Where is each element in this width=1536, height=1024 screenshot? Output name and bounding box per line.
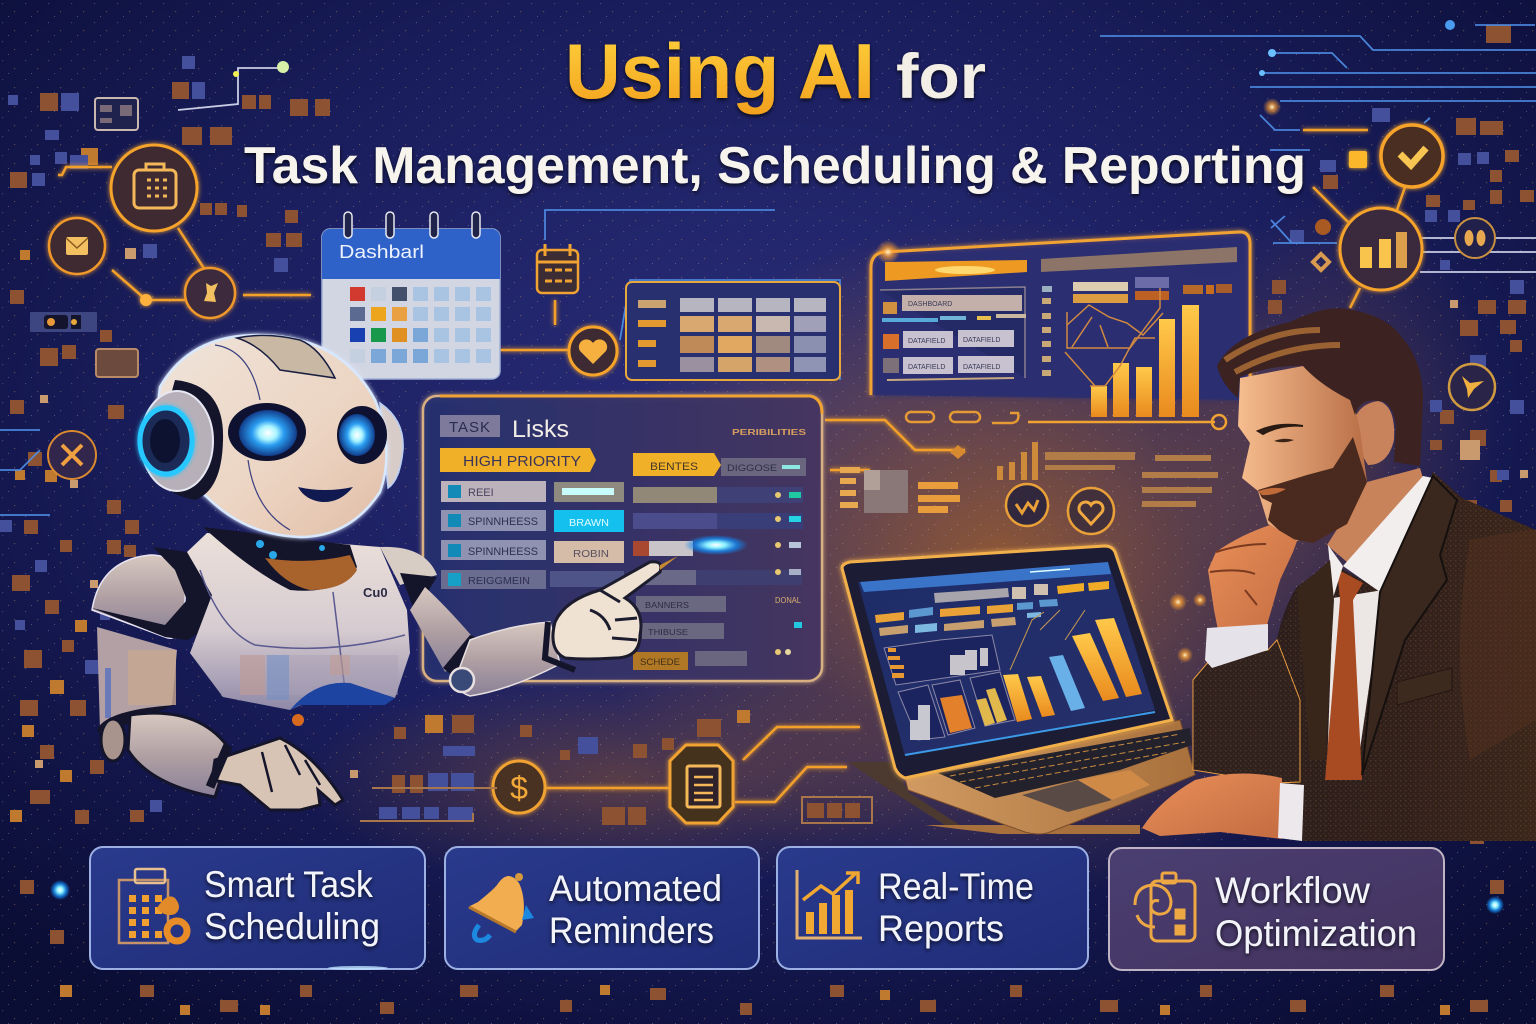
glow orbs <box>50 593 1504 970</box>
card: smart task scheduling <box>90 847 425 969</box>
robot upper arm <box>97 627 177 730</box>
lips <box>1258 488 1286 495</box>
icon: mail node <box>49 218 105 274</box>
small window left <box>96 349 138 377</box>
lower hand <box>1142 773 1282 839</box>
small text inside forms: DATAFIELD <box>963 364 1000 371</box>
small text inside forms: DATAFIELD <box>908 364 945 371</box>
right task rows: BANNERS <box>645 601 689 610</box>
icon: calendar node <box>111 145 197 231</box>
left task rows: SPINNHEESS <box>468 546 538 558</box>
trackpad <box>1022 780 1112 812</box>
card: workflow optimization <box>1109 848 1444 970</box>
robot torso reflection <box>240 655 398 695</box>
robot earpiece <box>150 380 223 500</box>
icon: bell <box>469 873 534 940</box>
card text: Reminders <box>549 910 714 951</box>
robot shoulder band <box>92 547 212 640</box>
robot shoulder <box>92 547 212 730</box>
capsule connectors <box>906 412 1018 423</box>
left forms <box>880 287 1026 380</box>
small chart panels <box>884 635 1000 685</box>
robot smile <box>298 487 353 502</box>
circuit lines <box>0 25 1536 515</box>
status tag <box>633 453 806 476</box>
robot bottom arch <box>290 683 395 710</box>
keyboard <box>938 728 1192 798</box>
icon: dollar node <box>493 761 545 813</box>
left task rows: ROBIN <box>573 549 609 560</box>
circuit lines: white <box>178 68 1536 272</box>
eye and brow <box>1258 425 1303 442</box>
card text: Real-Time <box>878 866 1034 907</box>
bottom rail <box>1028 421 1215 423</box>
card text: Workflow <box>1215 870 1370 911</box>
robot pointing hand <box>553 556 678 659</box>
icon: link node <box>1455 218 1495 258</box>
calendar grid <box>350 287 491 363</box>
calendar rings <box>344 212 480 238</box>
card text: Automated <box>549 868 722 909</box>
card: real-time reports <box>777 847 1088 969</box>
lower connectors <box>360 745 872 823</box>
task heading: PERIBILITIES <box>732 428 807 437</box>
header bars <box>885 260 1027 281</box>
robot right arm <box>380 547 575 696</box>
robot lower hand <box>210 738 343 810</box>
title <box>244 27 1306 195</box>
suit body <box>1240 472 1536 841</box>
bar chart <box>1091 305 1199 417</box>
face <box>1238 366 1367 541</box>
torso seams <box>200 570 405 690</box>
subtitle: Task Management, Scheduling & Reporting <box>244 137 1306 195</box>
orange dot <box>1315 219 1331 235</box>
task heading: TASK <box>449 419 491 436</box>
icon: document node <box>670 745 733 823</box>
robot eyes <box>228 403 306 461</box>
circuit lines: orange <box>58 130 1405 802</box>
card text: Optimization <box>1215 913 1417 954</box>
beard <box>1258 437 1367 543</box>
small window top-left <box>95 98 138 130</box>
man <box>1142 308 1536 841</box>
mini metrics <box>1042 286 1052 376</box>
icon: arrow node <box>1449 364 1495 410</box>
tie <box>1325 569 1363 780</box>
calendar panel <box>322 212 500 379</box>
task heading: Lisks <box>512 416 569 443</box>
left task rows: SPINNHEESS <box>468 516 538 528</box>
title: Using AI: Using AI <box>565 27 875 115</box>
laptop screen <box>858 562 1155 756</box>
right task rows: DONAL <box>775 596 802 605</box>
robot right ear <box>380 403 403 488</box>
screen widgets <box>875 581 1142 740</box>
raised sleeve <box>1193 640 1300 783</box>
icon: growth chart <box>797 870 862 938</box>
legend blocks <box>1073 282 1128 291</box>
icon: calendar small <box>537 244 578 293</box>
laptop chart bars <box>1003 674 1032 722</box>
icon: calendar gear <box>119 869 187 943</box>
robot chest label: Cu0 <box>363 585 388 600</box>
suit texture <box>1193 472 1536 841</box>
card text: Reports <box>878 908 1004 949</box>
left task rows: BRAWN <box>569 518 609 529</box>
small yellow glow dots <box>233 20 1455 116</box>
icon: heart node <box>569 327 617 375</box>
small text inside forms <box>908 301 1000 371</box>
icon: bar chart node <box>1340 208 1422 290</box>
right task rows: SCHEDE <box>640 657 680 667</box>
high priority tag: HIGH PRIORITY <box>463 453 581 470</box>
high priority tag <box>440 448 596 472</box>
left task rows <box>441 481 624 589</box>
hair <box>1217 308 1423 466</box>
card: automated reminders <box>445 847 759 969</box>
pocket <box>1397 668 1452 705</box>
task list panel <box>423 396 822 681</box>
right sleeve shading <box>1460 530 1536 760</box>
robot collar <box>203 527 357 591</box>
hair highlights <box>1225 330 1340 372</box>
icon: workflow <box>1135 873 1195 941</box>
laptop base <box>905 720 1195 834</box>
card text: Smart Task <box>204 864 373 905</box>
connector <box>1065 338 1155 386</box>
dashboard panel <box>871 232 1250 429</box>
task heading <box>440 415 807 443</box>
right task rows <box>633 487 803 670</box>
icon: check node <box>1381 125 1443 187</box>
icon: dollar node: $ <box>510 770 528 806</box>
calendar heading: Dashbarl <box>339 242 424 262</box>
robot head plate <box>237 335 335 378</box>
robot forearm <box>97 705 230 797</box>
small node dot <box>140 294 152 306</box>
collar <box>1328 476 1433 598</box>
title: for: for <box>896 42 986 112</box>
robot head <box>140 335 403 537</box>
lapel left <box>1297 560 1334 760</box>
lower cuff <box>1278 783 1304 841</box>
status tag: DIGGOSE <box>727 463 777 473</box>
raised cuff <box>1205 624 1268 668</box>
left task rows: REEI <box>468 487 494 499</box>
robot torso <box>187 527 410 726</box>
mini widgets <box>360 788 872 823</box>
mid connector elements <box>840 442 1218 534</box>
small text inside forms: DATAFIELD <box>963 337 1000 344</box>
icon: tools node <box>48 431 96 479</box>
right task rows: THIBUSE <box>648 628 688 637</box>
icon: pin node <box>185 268 235 318</box>
line chart <box>1067 288 1163 348</box>
status tag: BENTES <box>650 461 698 473</box>
ear <box>1353 401 1394 465</box>
lapel right <box>1362 476 1457 775</box>
laptop lid <box>842 546 1172 778</box>
robot <box>92 335 678 810</box>
neck <box>1327 468 1423 562</box>
laptop desk pad <box>848 762 963 827</box>
shirt <box>1327 590 1383 770</box>
table panel <box>626 282 840 380</box>
small gold square <box>1349 151 1367 168</box>
raised hand <box>1208 525 1297 640</box>
small text inside forms: DASHBOARD <box>908 301 952 308</box>
diamond <box>1313 254 1329 270</box>
card text: Scheduling <box>204 906 380 947</box>
small text inside forms: DATAFIELD <box>908 338 945 345</box>
robot head shell <box>159 335 386 537</box>
left task rows: REIGGMEIN <box>468 576 530 587</box>
small chip left <box>30 312 97 332</box>
fingers <box>1210 544 1266 605</box>
laptop <box>842 546 1195 834</box>
